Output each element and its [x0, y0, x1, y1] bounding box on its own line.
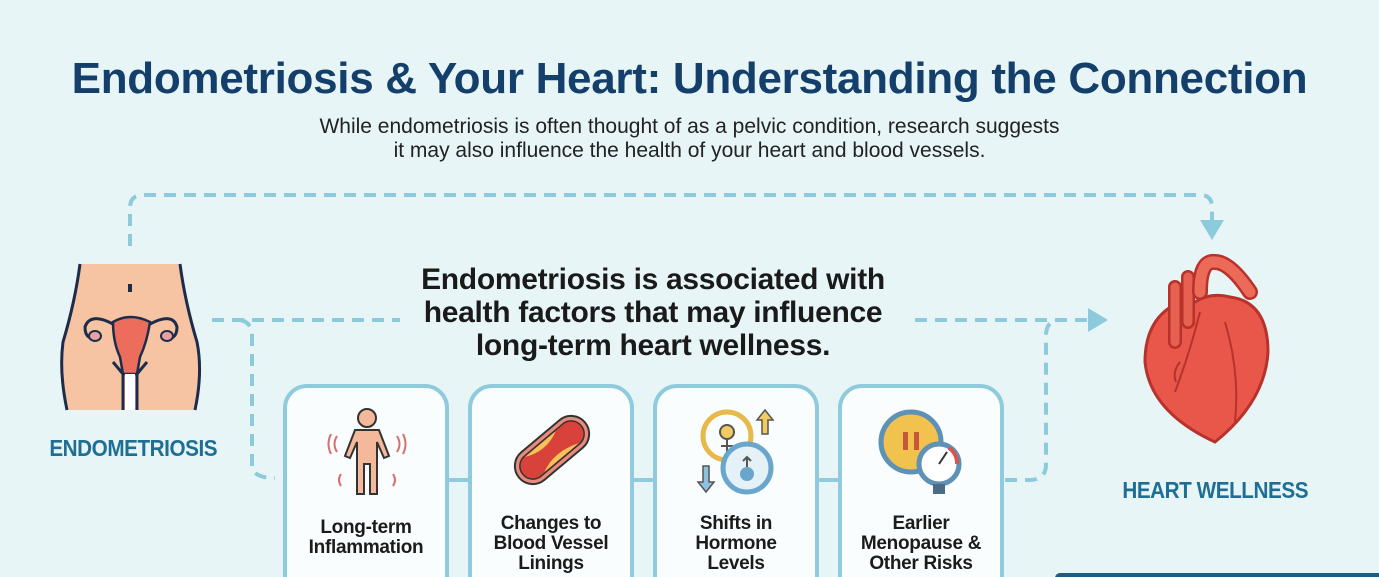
- text: Linings: [518, 553, 584, 574]
- text: Changes to: [501, 513, 601, 534]
- text: Shifts in: [700, 513, 772, 534]
- card: blood vessel: [468, 384, 634, 577]
- icon: hormone symbols: [696, 408, 774, 494]
- text: [861, 513, 981, 574]
- text: Earlier: [892, 513, 950, 534]
- text: Long-term: [320, 517, 412, 538]
- text: [695, 513, 777, 574]
- text: Other Risks: [869, 553, 973, 574]
- title: Endometriosis & Your Heart: Understanding the Connection: [72, 54, 1307, 103]
- icon: pelvis: [60, 264, 202, 410]
- central statement: Endometriosis is associated with: [421, 263, 885, 296]
- subtitle: [319, 115, 1060, 162]
- text: Menopause &: [861, 533, 981, 554]
- icon: clock and gauge: [878, 410, 962, 494]
- text: [309, 517, 423, 558]
- icon: vessel: [514, 414, 590, 486]
- icon: person: [328, 408, 406, 495]
- text: [494, 513, 608, 574]
- bottom bar: [1055, 573, 1379, 577]
- card: menopause: [838, 384, 1004, 577]
- central statement: health factors that may influence: [424, 296, 882, 329]
- label: heart wellness: HEART WELLNESS: [1122, 477, 1308, 503]
- icon: heart: [1144, 254, 1270, 444]
- card: hormones: [653, 384, 819, 577]
- label: endometriosis: ENDOMETRIOSIS: [49, 435, 217, 461]
- text: Inflammation: [309, 537, 423, 558]
- subtitle: While endometriosis is often thought of as a pelvic condition, research suggests: [319, 115, 1060, 138]
- text: Levels: [707, 553, 765, 574]
- text: Hormone: [695, 533, 777, 554]
- text: Blood Vessel: [494, 533, 608, 554]
- central statement: long-term heart wellness.: [476, 329, 830, 362]
- card: inflammation: [283, 384, 449, 577]
- subtitle: it may also influence the health of your heart and blood vessels.: [394, 139, 985, 162]
- central statement: [421, 263, 885, 362]
